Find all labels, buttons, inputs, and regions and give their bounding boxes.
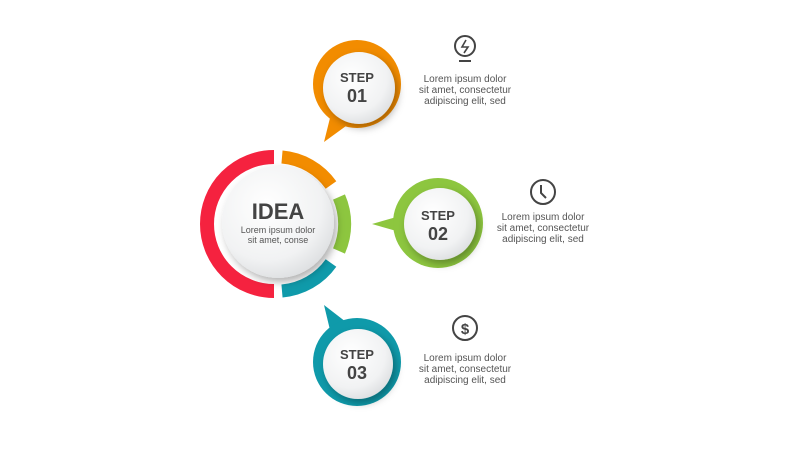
central idea ring: sit amet, conse (248, 235, 308, 245)
icon: dollar (453, 316, 477, 340)
text: step 03: adipiscing elit, sed (424, 375, 506, 386)
step 01 bubble: STEP (340, 70, 374, 85)
step 01 bubble: 01 (347, 86, 367, 106)
idea text: Lorem ipsum dolor (241, 225, 315, 235)
icon: dollar: $ (461, 321, 470, 338)
text: step 01: sit amet, consectetur (419, 85, 512, 96)
idea white circle (222, 166, 334, 278)
step 03 bubble (313, 305, 401, 406)
step 03 bubble: 03 (347, 363, 367, 383)
icon: light bulb (455, 36, 475, 61)
step 03 bubble: STEP (340, 347, 374, 362)
text: step 01 (419, 74, 512, 107)
arc: green (339, 197, 345, 251)
step 01 bubble (313, 40, 401, 142)
central idea ring (207, 157, 345, 291)
text: step 03 (419, 353, 512, 386)
step 02 bubble: STEP (421, 208, 455, 223)
text: step 03: sit amet, consectetur (419, 364, 512, 375)
text: step 01: Lorem ipsum dolor (424, 74, 507, 85)
arc: orange (282, 157, 331, 185)
step 02 bubble: 02 (428, 224, 448, 244)
idea heading: IDEA (252, 199, 304, 224)
text: step 02: adipiscing elit, sed (502, 234, 584, 245)
icon: clock (531, 180, 555, 204)
text: step 01: adipiscing elit, sed (424, 96, 506, 107)
text: step 02: sit amet, consectetur (497, 223, 590, 234)
text: step 02 (497, 212, 590, 245)
arc: teal (282, 263, 331, 291)
arc: red (207, 157, 274, 291)
text: step 02: Lorem ipsum dolor (502, 212, 585, 223)
step 02 bubble (372, 178, 483, 268)
text: step 03: Lorem ipsum dolor (424, 353, 507, 364)
